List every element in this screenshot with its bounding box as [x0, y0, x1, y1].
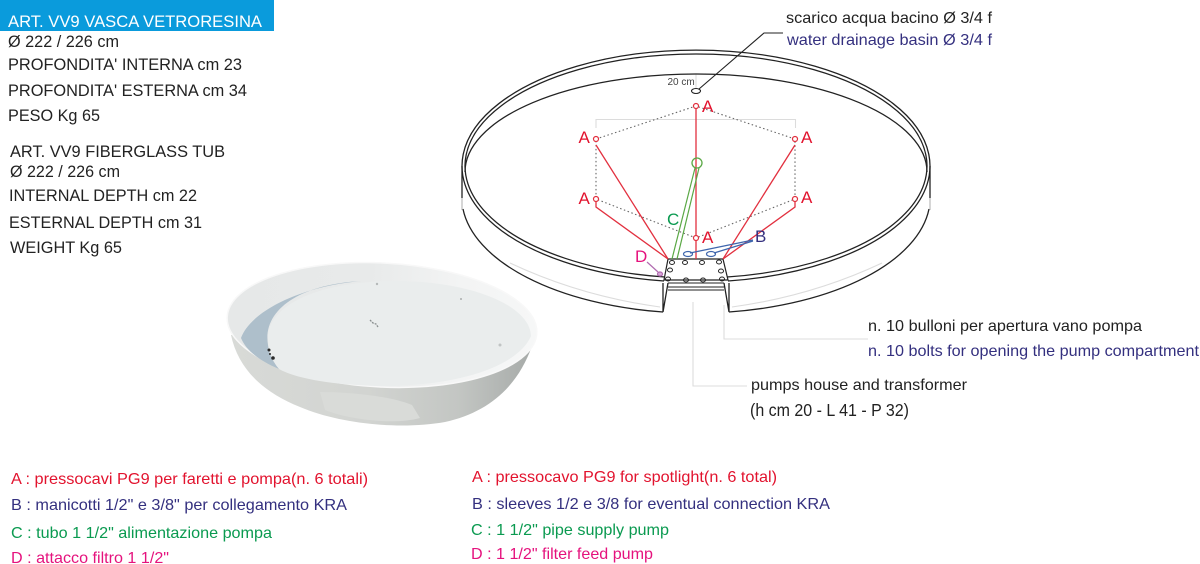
photo: fiberglass tub — [224, 255, 540, 426]
tub rim outer edge — [462, 50, 930, 281]
diagram letters — [578, 97, 813, 266]
red cable lines — [596, 106, 795, 259]
text block: English specifications — [9, 143, 225, 257]
legend: Italian: B : manicotti 1/2" e 3/8" per collegamento KRA — [11, 497, 347, 514]
drain hole with leader — [692, 33, 783, 94]
speckled highlight — [320, 392, 420, 421]
water-coloured crescent — [241, 281, 362, 369]
legend: English — [471, 469, 830, 563]
header bar — [0, 0, 274, 31]
callout: bolts — [724, 305, 1200, 360]
dimension label: 20 cm — [668, 77, 695, 88]
pump compartment — [663, 259, 729, 312]
legend: Italian: C : tubo 1 1/2" alimentazione pompa — [11, 525, 272, 542]
diagram letters: D — [635, 247, 647, 266]
text block: Italian specifications: PROFONDITA' INTERNA cm 23 — [8, 56, 242, 74]
callout: water drainage — [786, 10, 993, 49]
tub outer wall — [462, 166, 930, 312]
diagram letters: B — [755, 227, 766, 246]
blue sleeves — [684, 240, 753, 256]
legend: Italian — [11, 471, 368, 564]
text block: Italian specifications: PROFONDITA' ESTERNA cm 34 — [8, 82, 247, 100]
diagram letters: A — [801, 128, 813, 147]
pump compartment bolts — [666, 260, 724, 282]
technical diagram: tub top view — [462, 33, 930, 312]
legend: English: B : sleeves 1/2 e 3/8 for eventual connection KRA — [472, 496, 830, 513]
diagram letters: C — [667, 210, 679, 229]
callout: pump house: pumps house and transformer — [751, 377, 968, 394]
magenta filter connection — [647, 262, 662, 276]
legend: English: D : 1 1/2" filter feed pump — [471, 546, 653, 563]
diagram letters: A — [702, 228, 714, 247]
green pump supply pipe — [672, 158, 702, 259]
legend: Italian: A : pressocavi PG9 per faretti e pompa(n. 6 totali) — [11, 471, 368, 488]
text block: English specifications: WEIGHT Kg 65 — [10, 239, 122, 257]
diagram letters: A — [578, 189, 590, 208]
callout: bolts: n. 10 bolts for opening the pump compartment — [868, 343, 1200, 360]
gray secondary edges — [510, 74, 882, 307]
spotlight cable glands — [594, 104, 798, 240]
tub floor disc — [268, 281, 531, 386]
text block: Italian specifications — [8, 13, 262, 125]
text block: English specifications: ART. VV9 FIBERGLASS TUB — [10, 143, 225, 161]
diagram letters: A — [801, 188, 813, 207]
tub rim and inner wall — [224, 255, 540, 395]
legend: English: C : 1 1/2" pipe supply pump — [471, 522, 669, 539]
dotted spotlight hexagon — [596, 106, 795, 238]
callout: bolts: n. 10 bulloni per apertura vano pompa — [868, 318, 1142, 335]
text block: English specifications: ESTERNAL DEPTH cm 31 — [9, 214, 202, 232]
diagram letters: A — [702, 97, 714, 116]
text block: English specifications: Ø 222 / 226 cm — [10, 163, 120, 181]
text block: English specifications: INTERNAL DEPTH cm 22 — [9, 187, 197, 205]
product title: ART. VV9 VASCA VETRORESINA — [8, 13, 262, 31]
legend: English: A : pressocavo PG9 for spotlight(n. 6 total) — [472, 469, 777, 486]
text block: Italian specifications: PESO Kg 65 — [8, 107, 100, 125]
tub rim inner edge — [465, 54, 927, 277]
floor fittings — [268, 348, 275, 360]
tub outer body — [231, 335, 534, 426]
diagram letters: A — [578, 128, 590, 147]
tub floor edge — [465, 74, 927, 172]
callout: pump house — [693, 302, 968, 420]
callout: water drainage: scarico acqua bacino Ø 3/4 f — [786, 10, 993, 27]
callout: pump house: (h cm 20 - L 41 - P 32) — [750, 400, 909, 420]
text block: Italian specifications: Ø 222 / 226 cm — [8, 33, 119, 51]
callout: water drainage: water drainage basin Ø 3/4 f — [786, 32, 993, 49]
